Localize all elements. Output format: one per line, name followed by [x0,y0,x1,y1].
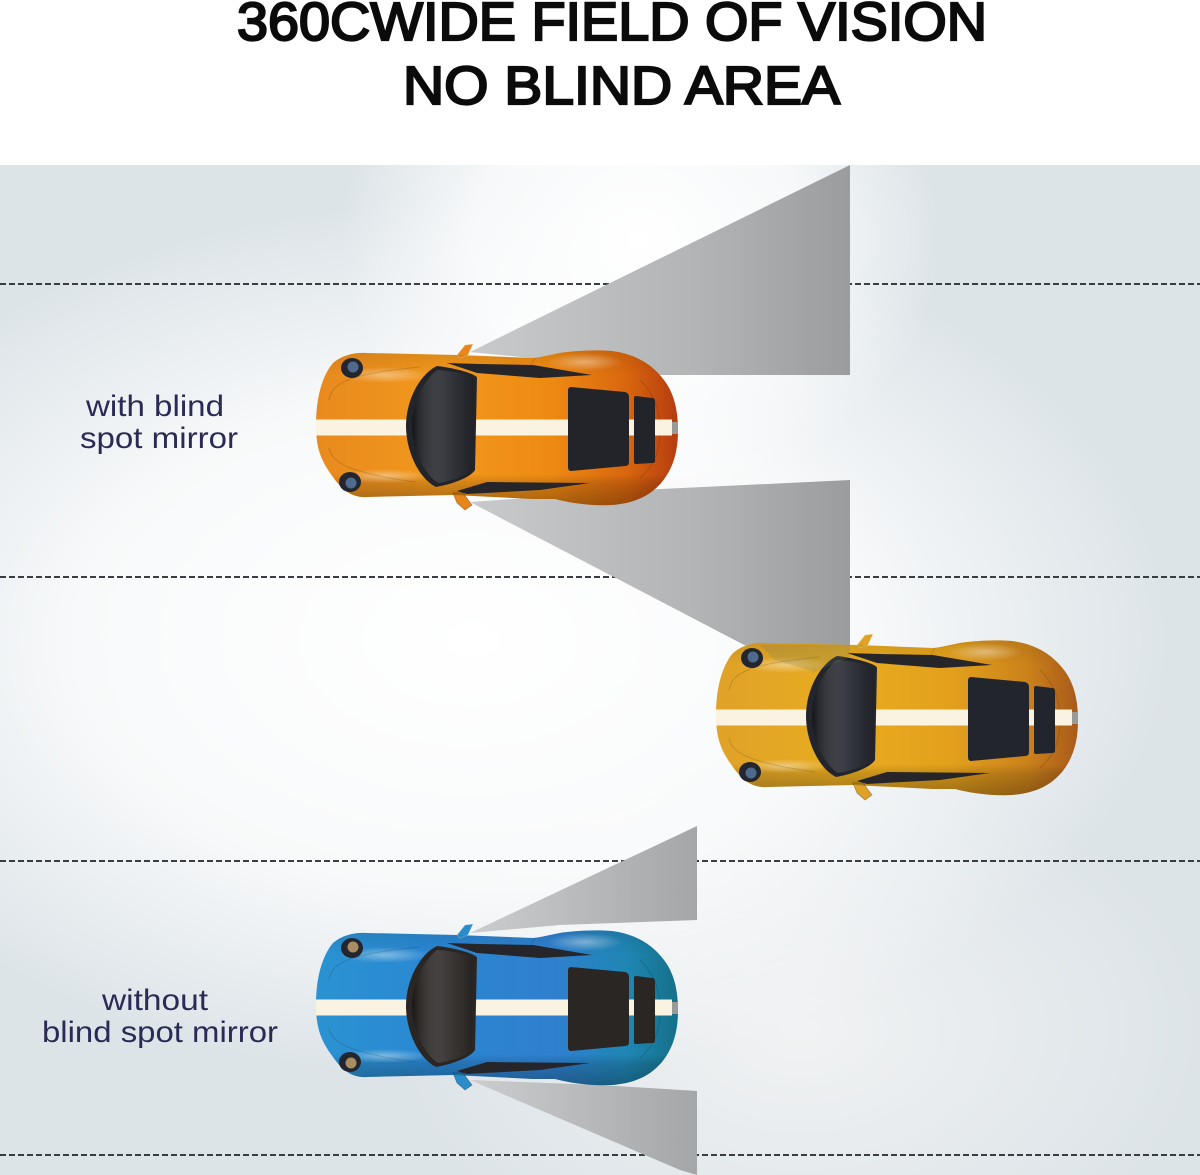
lane dividers [0,284,1200,1155]
vision cone: orange car upper [470,165,850,375]
label: without blind spot mirror: without [101,984,209,1017]
label: with blind spot mirror: with blind [85,390,224,423]
vision cone: orange car lower [470,480,850,650]
title [237,0,987,116]
label: without blind spot mirror: blind spot mirror [42,1016,278,1049]
title: NO BLIND AREA [403,56,840,116]
label: with blind spot mirror: spot mirror [80,422,238,455]
car: orange with blind spot mirror [316,344,678,510]
label: with blind spot mirror [80,390,238,455]
label: without blind spot mirror [42,984,278,1049]
shadow of vision cone on yellow car hood [760,645,850,672]
car: yellow following vehicle [716,634,1078,800]
car: blue without blind spot mirror [316,924,678,1090]
vision cone: blue car lower [470,1080,697,1175]
vision cone: blue car upper [470,826,697,933]
